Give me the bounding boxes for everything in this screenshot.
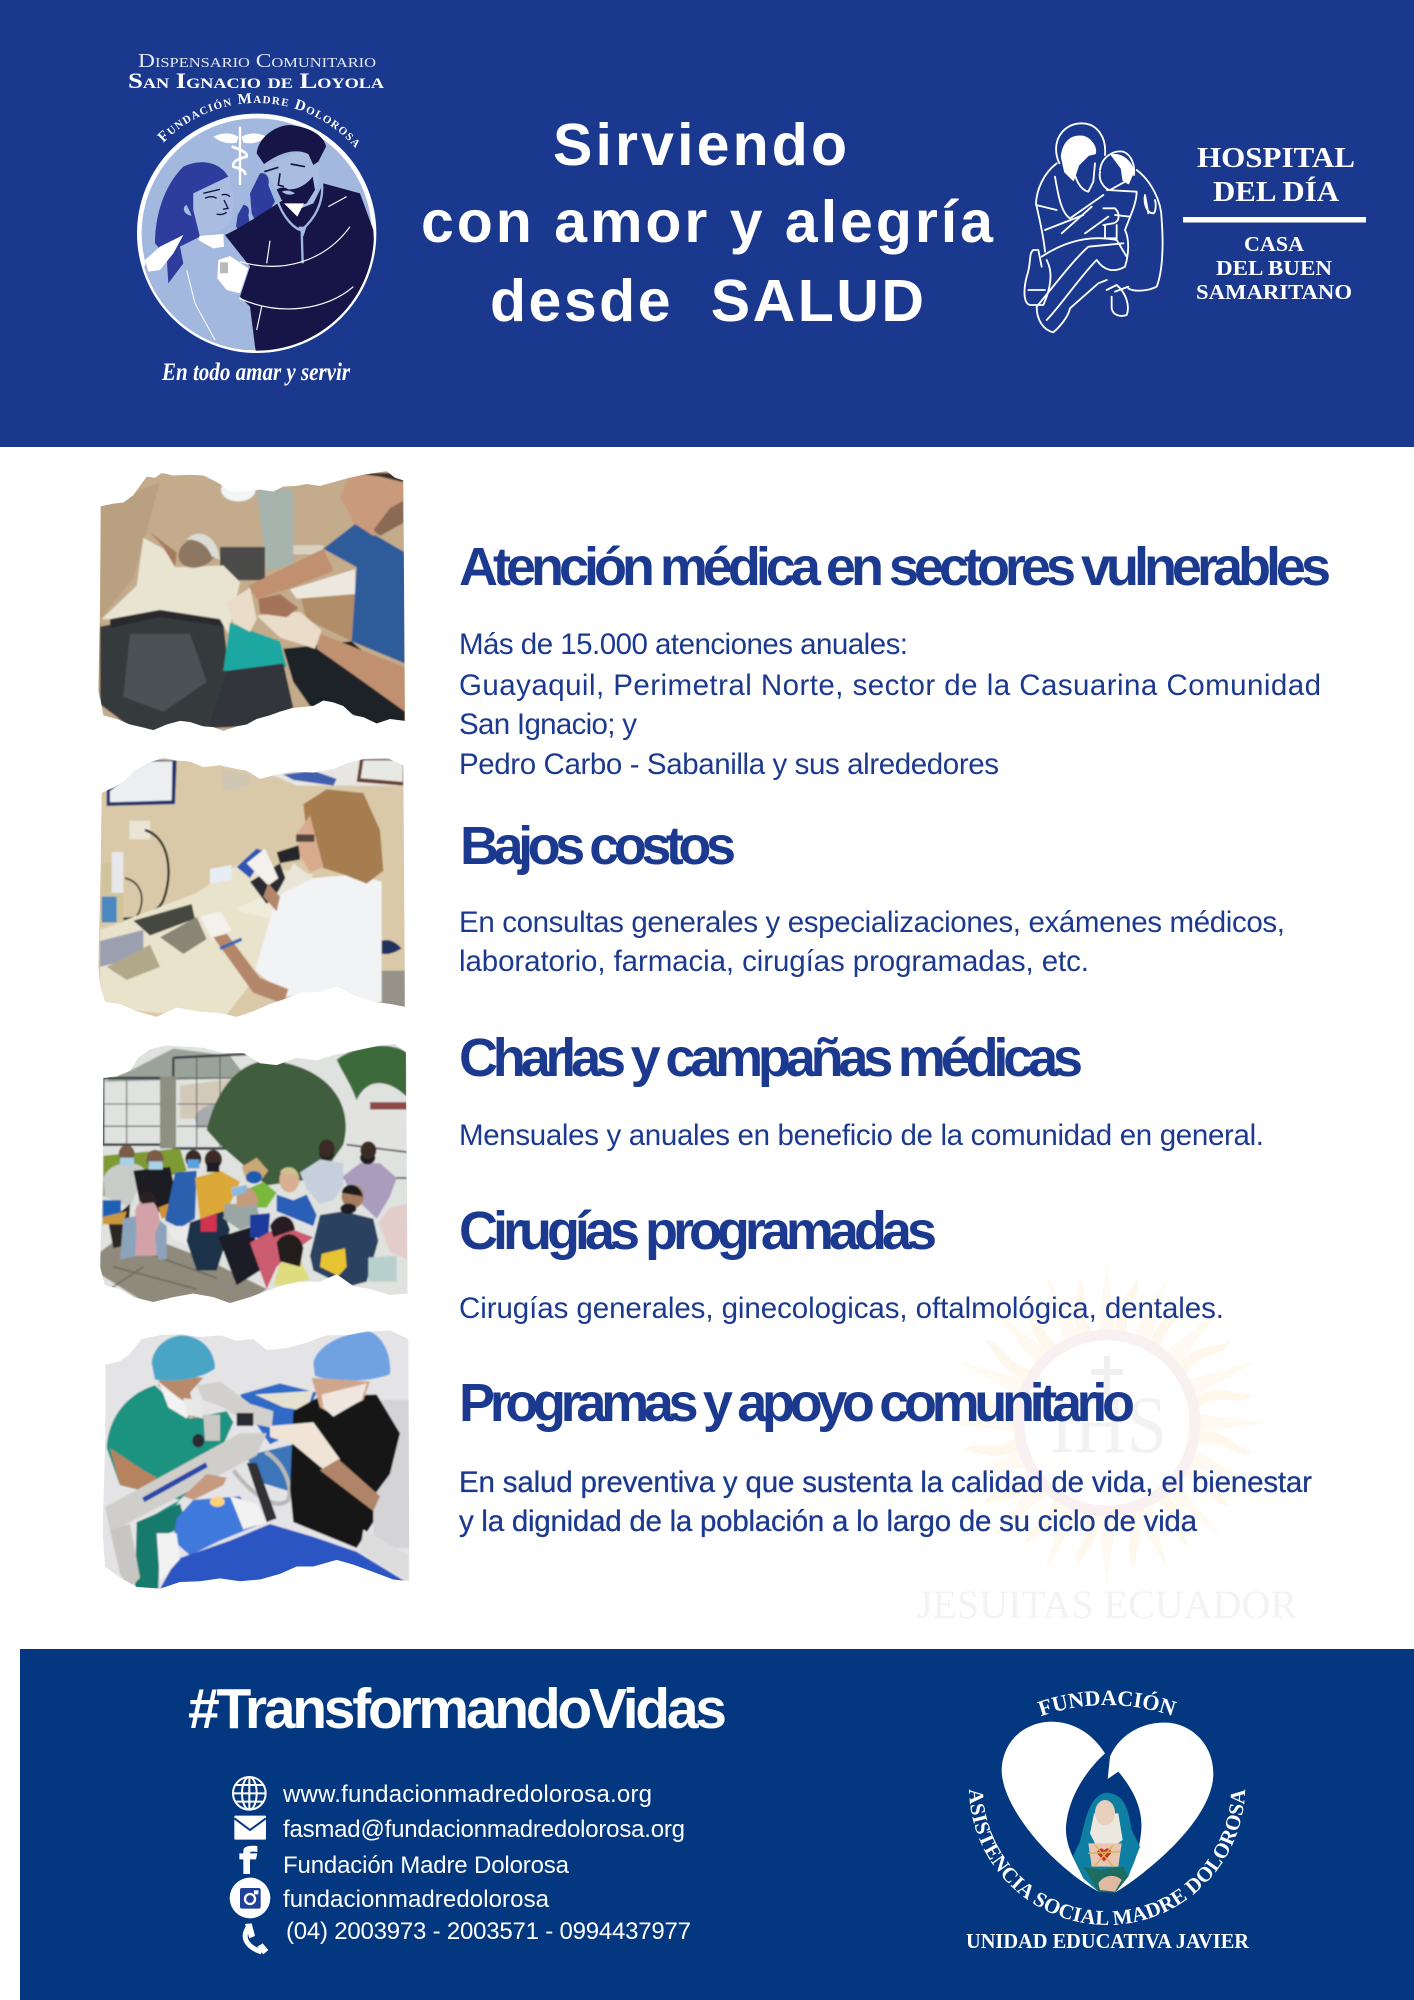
- logo: Fundación Asistencia Social Madre Dolorosa: UNIDAD EDUCATIVA JAVIER: [966, 1929, 1250, 1953]
- text block: En salud preventiva y que sustenta la calidad de vida, el bienestar: [459, 1466, 1312, 1499]
- logo: Fundación Asistencia Social Madre Dolorosa: FUNDACIÓN: [1036, 1690, 1177, 1716]
- logo: Fundación Asistencia Social Madre Dolorosa: [966, 1690, 1250, 1953]
- group: [103, 1163, 145, 1208]
- text block: [459, 628, 1321, 781]
- heading: Programas y apoyo comunitario: [459, 1373, 1135, 1433]
- contact list: [230, 1777, 691, 1954]
- text block: laboratorio, farmacia, cirugías programadas, etc.: [459, 945, 1089, 978]
- contact list: fasmad@fundacionmadredolorosa.org: [283, 1816, 685, 1843]
- photo: community group: [97, 1041, 413, 1308]
- section: talks and campaigns: [459, 1028, 1264, 1152]
- heading: Cirugías programadas: [459, 1201, 937, 1261]
- text block: En consultas generales y especializaciones, exámenes médicos,: [459, 906, 1285, 939]
- heading: Bajos costos: [460, 816, 736, 876]
- text block: Cirugías generales, ginecologicas, oftalmológica, dentales.: [459, 1292, 1224, 1325]
- icon: globe: [233, 1777, 266, 1810]
- logo text: Hospital del Día: HOSPITAL: [1197, 142, 1355, 174]
- text block: [459, 906, 1285, 978]
- heading: Atención médica en sectores vulnerables: [459, 537, 1331, 597]
- icon: facebook: [239, 1846, 257, 1874]
- icon: envelope: [234, 1816, 266, 1840]
- logo: Dispensario San Ignacio de Loyola: En todo amar y servir: [161, 359, 350, 386]
- logo: Dispensario San Ignacio de Loyola: Fundación Madre Dolorosa: [156, 93, 359, 148]
- section: medical care: [459, 537, 1331, 781]
- icon: heart: [1002, 1722, 1213, 1893]
- text block: y la dignidad de la población a lo largo de su ciclo de vida: [459, 1505, 1198, 1538]
- heading: Charlas y campañas médicas: [459, 1028, 1083, 1088]
- icon: phone: [245, 1923, 268, 1954]
- watermark: Jesuitas Ecuador: JESUITAS ECUADOR: [917, 1582, 1297, 1627]
- icon: Virgin Mary: [1073, 1793, 1140, 1893]
- text block: Guayaquil, Perimetral Norte, sector de la Casuarina Comunidad: [459, 669, 1321, 702]
- logo text: Hospital del Día: DEL DÍA: [1213, 175, 1339, 208]
- logo: Dispensario San Ignacio de Loyola: San Ignacio de Loyola: [128, 68, 384, 93]
- title: Sirviendo: [553, 112, 847, 178]
- logo: Dispensario San Ignacio de Loyola: [128, 50, 384, 386]
- woman: [144, 263, 255, 350]
- contact list: fundacionmadredolorosa: [283, 1886, 550, 1913]
- icon: good samaritan line drawing: [1024, 123, 1163, 332]
- text block: Pedro Carbo - Sabanilla y sus alrededores: [459, 748, 999, 781]
- section: low costs: [459, 816, 1285, 978]
- title: con amor y alegría: [421, 189, 994, 255]
- contact list: www.fundacionmadredolorosa.org: [282, 1781, 652, 1808]
- logo text: Hospital del Día: SAMARITANO: [1196, 280, 1352, 304]
- footer band: [20, 1649, 1414, 2000]
- logo text: Hospital del Día: DEL BUEN: [1216, 256, 1332, 280]
- icon: instagram: [230, 1878, 270, 1918]
- man: [225, 183, 377, 353]
- photo: patient care: [97, 467, 410, 734]
- text block: [459, 1466, 1312, 1538]
- logo: Fundación Asistencia Social Madre Dolorosa: ASISTENCIA SOCIAL MADRE DOLOROSA: [968, 1789, 1246, 1926]
- section: community programs: [459, 1373, 1312, 1538]
- logo text: Hospital del Día: CASA: [1244, 232, 1305, 256]
- logo text: Hospital del Día: [1183, 142, 1366, 304]
- title: [421, 112, 994, 334]
- photo: laboratory: [97, 756, 410, 1022]
- header band: [0, 0, 1414, 447]
- section: scheduled surgery: [459, 1201, 1224, 1325]
- watermark: Jesuitas Ecuador: IHS: [1050, 1379, 1167, 1470]
- watermark: Jesuitas Ecuador: [917, 1262, 1297, 1627]
- hashtag: #TransformandoVidas: [188, 1677, 727, 1741]
- contact list: Fundación Madre Dolorosa: [283, 1852, 570, 1879]
- text block: Mensuales y anuales en beneficio de la comunidad en general.: [459, 1119, 1264, 1152]
- photo: eye surgery: [100, 1326, 413, 1592]
- text block: Más de 15.000 atenciones anuales:: [459, 628, 908, 661]
- text block: San Ignacio; y: [459, 708, 637, 741]
- title: desde SALUD: [490, 268, 924, 334]
- contact list: (04) 2003973 - 2003571 - 0994437977: [286, 1918, 691, 1945]
- logo: Dispensario San Ignacio de Loyola: Dispensario Comunitario: [138, 50, 376, 72]
- hand: [217, 256, 248, 293]
